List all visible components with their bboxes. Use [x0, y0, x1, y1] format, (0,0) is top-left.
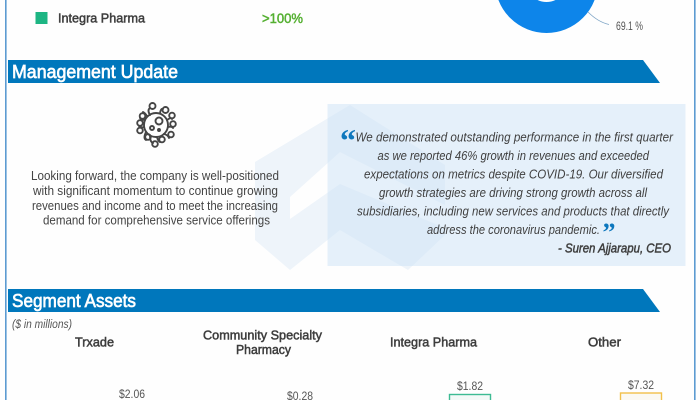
quote text — [356, 130, 674, 237]
segment: Community Specialty Pharmacy: Pharmacy — [236, 342, 291, 357]
segment: Integra Pharma: Integra Pharma — [390, 334, 478, 350]
legend row: Integra Pharma: Integra Pharma — [58, 10, 146, 26]
segment: Other — [588, 334, 662, 400]
management outlook text: revenues and income and to meet the increasing — [32, 199, 278, 213]
quote attribution: - Suren Ajjarapu, CEO — [558, 240, 671, 256]
segment: Other: Other — [588, 334, 622, 350]
management outlook text: with significant momentum to continue growing — [32, 184, 278, 198]
donut chart: 69.1 % — [616, 21, 643, 33]
units note: ($ in millions) — [12, 319, 72, 331]
section banner: Segment Assets: Segment Assets — [12, 291, 136, 311]
legend row: Integra Pharma: >100% — [262, 10, 303, 26]
section banner: Segment Assets — [8, 289, 660, 312]
segment: Other: $7.32 — [628, 380, 654, 392]
management outlook text — [31, 169, 279, 228]
watermark chevrons — [255, 105, 445, 270]
management outlook text: demand for comprehensive service offerings — [43, 214, 270, 228]
section banner: Management Update: Management Update — [12, 62, 178, 82]
donut chart — [510, 0, 643, 33]
segment: Community Specialty Pharmacy: Community Specialty — [203, 328, 322, 342]
segment: Integra Pharma — [390, 334, 490, 400]
segment: Community Specialty Pharmacy — [203, 328, 322, 400]
quote text: as we reported 46% growth in revenues and exceeded — [378, 148, 650, 163]
section banner: Management Update — [8, 60, 660, 83]
legend row: Integra Pharma — [36, 10, 303, 26]
quote text: growth strategies are driving strong growth across all — [379, 185, 648, 200]
quote text: expectations on metrics despite COVID-19. Our diversified — [364, 166, 664, 182]
closing quote mark: ” — [602, 218, 616, 247]
icon: coronavirus — [137, 103, 176, 147]
panel: CEO quote — [328, 104, 686, 266]
segment: Integra Pharma: $1.82 — [457, 381, 483, 393]
management outlook text: Looking forward, the company is well-positioned — [31, 169, 279, 183]
quote text: address the coronavirus pandemic. — [427, 222, 600, 237]
quote text: We demonstrated outstanding performance in the first quarter — [356, 130, 674, 144]
opening quote mark: “ — [340, 122, 356, 158]
segment: Trxade: Trxade — [75, 334, 114, 350]
segment: Trxade — [75, 334, 145, 400]
